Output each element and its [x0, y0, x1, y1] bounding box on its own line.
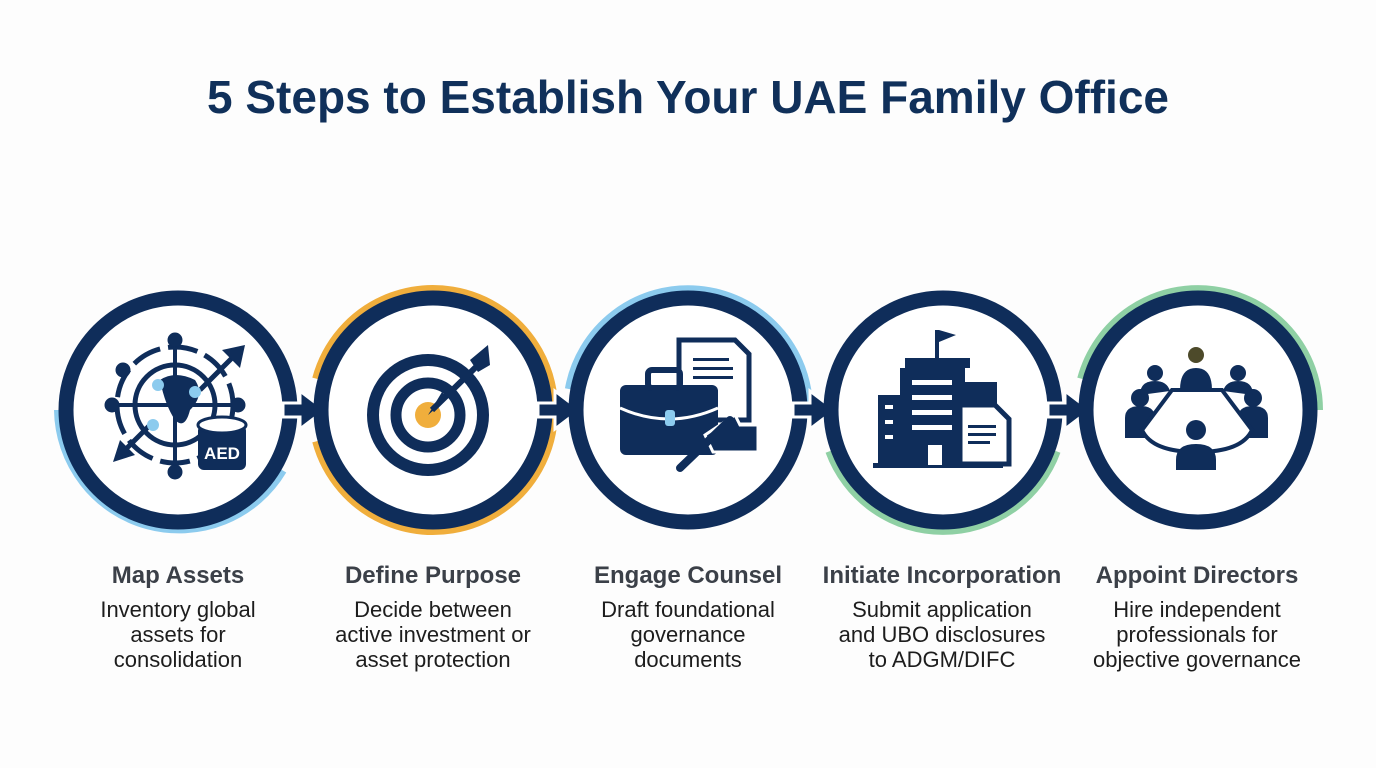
step 3 text [594, 562, 782, 672]
step 1 text [100, 562, 256, 672]
circle 2: define purpose [315, 288, 555, 532]
step 2 text: asset protection [355, 647, 511, 672]
circle 4: initiate incorporation [828, 298, 1058, 532]
step 4 text: to ADGM/DIFC [869, 647, 1015, 672]
icon: globe network with AED: AED [204, 444, 240, 463]
step 1 text: assets for [130, 622, 226, 647]
circle 5: appoint directors [1080, 288, 1320, 522]
step 2 text [335, 562, 531, 672]
step 4 text: and UBO disclosures [839, 622, 1045, 647]
arrow 1 [283, 391, 325, 429]
icon: target [373, 345, 490, 470]
arrow 2 [538, 391, 580, 429]
step 3 text: Engage Counsel [594, 562, 782, 589]
title: 5 Steps to Establish Your UAE Family Office [207, 71, 1169, 123]
step 5 text: Hire independent [1113, 597, 1281, 622]
step 4 text: Initiate Incorporation [823, 562, 1061, 589]
step 3 text: governance [630, 622, 745, 647]
step 2 text: active investment or [335, 622, 531, 647]
icon: building with document [873, 330, 1009, 468]
step 2 text: Decide between [354, 597, 512, 622]
circle 3: engage counsel [568, 288, 810, 522]
step 4 text [823, 562, 1061, 672]
icon: globe network with AED [105, 333, 246, 479]
icon: briefcase and document [620, 340, 758, 468]
circle 1: map assets [57, 298, 290, 530]
step 4 text: Submit application [852, 597, 1032, 622]
icon: boardroom [1125, 347, 1268, 470]
step 1 text: consolidation [114, 647, 242, 672]
step 5 text: objective governance [1093, 647, 1301, 672]
step 5 text: Appoint Directors [1096, 562, 1298, 589]
step 1 text: Map Assets [112, 562, 244, 589]
step 3 text: documents [634, 647, 742, 672]
step 3 text: Draft foundational [601, 597, 775, 622]
step 2 text: Define Purpose [345, 562, 521, 589]
step 1 text: Inventory global [100, 597, 256, 622]
step 5 text: professionals for [1116, 622, 1278, 647]
step 5 text [1093, 562, 1301, 672]
arrow 3 [793, 391, 835, 429]
arrow 4 [1048, 391, 1090, 429]
